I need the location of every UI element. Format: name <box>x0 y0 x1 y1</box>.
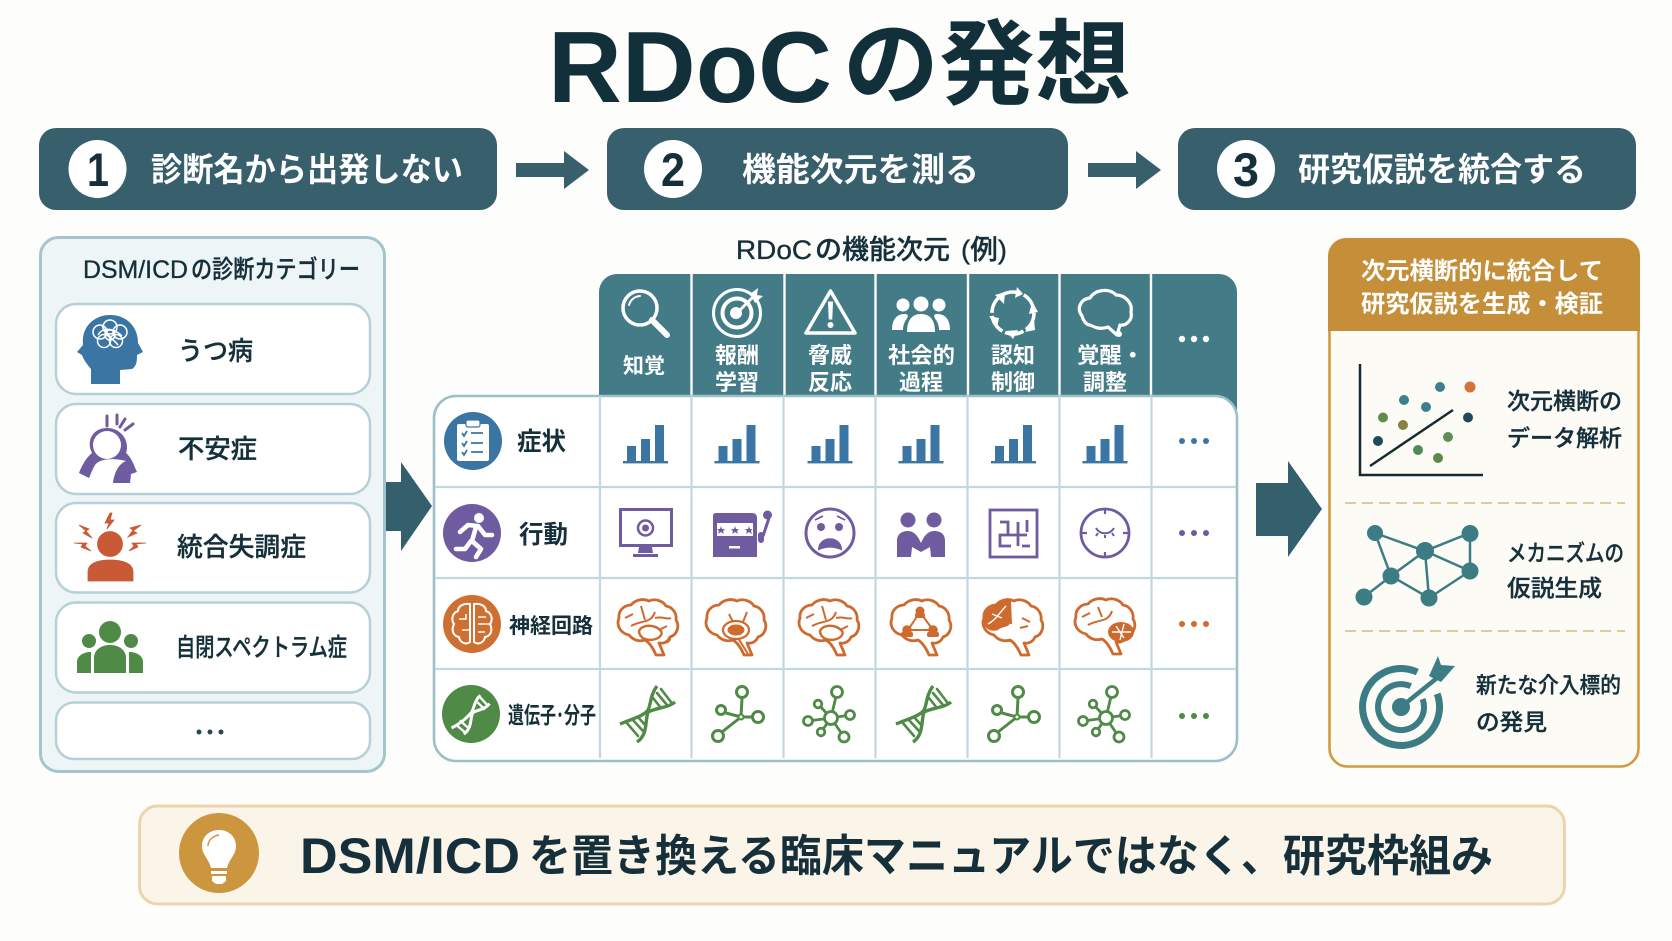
icon: brain outline <box>618 600 678 655</box>
row: behaviour <box>443 504 1209 562</box>
icon: brain circuit <box>443 595 501 653</box>
column: social processes: 過程 <box>899 370 943 395</box>
arrow: matrix to hypotheses <box>1256 461 1322 557</box>
callout: research framework: DSM/ICD <box>300 828 520 884</box>
row: autism spectrum: 自閉スペクトラム症 <box>176 634 347 662</box>
icon: clock with closed eye <box>1081 509 1129 557</box>
label: data analysis <box>1507 388 1622 451</box>
row: depression: うつ病 <box>178 336 253 366</box>
icon: molecule <box>712 686 764 742</box>
table heading: (例) <box>961 235 1007 265</box>
step 1 banner <box>39 128 497 210</box>
row: neural circuits <box>443 595 1209 655</box>
panel header: 次元横断的に統合して <box>1361 258 1603 285</box>
icon: maze <box>990 510 1037 557</box>
label: mechanism hypotheses: 仮説生成 <box>1507 575 1602 601</box>
column: perception: 知覚 <box>623 355 665 378</box>
panel: integrate across dimensions <box>1328 238 1640 766</box>
arrow: categories to matrix <box>386 462 432 551</box>
table heading: RDoC <box>736 235 812 265</box>
icon: light bulb <box>179 813 259 893</box>
arrow: step 2 to step 3 <box>1088 151 1161 189</box>
icon: two people <box>897 512 945 557</box>
column: arousal and regulation: 調整 <box>1083 370 1127 395</box>
step 1 banner: 診断名から出発しない <box>151 151 463 188</box>
row: symptoms <box>444 412 1209 470</box>
row: schizophrenia <box>56 503 370 592</box>
title <box>548 12 1131 124</box>
row: symptoms: 症状 <box>517 428 566 456</box>
label: data analysis: データ解析 <box>1507 425 1622 451</box>
column: perception <box>623 291 667 378</box>
icon: fearful face <box>806 509 854 557</box>
panel heading: DSM/ICD <box>83 256 188 284</box>
label: new intervention targets: 新たな介入標的 <box>1476 673 1621 698</box>
icon: runner <box>443 504 501 562</box>
column: social processes: 社会的 <box>888 343 955 368</box>
step 3 banner: 3 <box>1233 143 1259 196</box>
icon: DNA <box>620 686 675 742</box>
title: の発想 <box>843 13 1131 117</box>
icon: monitor <box>620 510 672 557</box>
icon: hub molecule <box>804 686 854 742</box>
arrow: step 1 to step 2 <box>516 151 589 189</box>
callout: research framework: を置き換える臨床マニュアルではなく、研究枠組み <box>529 832 1493 881</box>
column: more dimensions <box>1179 336 1209 342</box>
column: threat response: 反応 <box>808 370 852 395</box>
step 2 banner: 機能次元を測る <box>742 151 979 188</box>
chart: RDoC matrix <box>434 274 1237 761</box>
column: arousal and regulation <box>1077 290 1144 395</box>
row: genes and molecules <box>442 685 1209 743</box>
column: cognitive control: 認知 <box>991 343 1035 368</box>
icon: brain with cerebellum <box>1075 599 1135 654</box>
icon: brain with prefrontal highlight <box>983 600 1043 655</box>
icon: DNA badge <box>442 685 500 743</box>
column: reward learning <box>714 288 763 395</box>
panel: DSM/ICD diagnostic categories <box>40 238 384 772</box>
icon: three people <box>77 621 143 673</box>
column: cognitive control: 制御 <box>991 370 1035 395</box>
column: threat response: 脅威 <box>808 343 852 368</box>
step 1 banner: 1 <box>87 143 109 196</box>
step 2 banner <box>607 128 1068 210</box>
label: data analysis: 次元横断の <box>1507 388 1622 414</box>
column: arousal and regulation: 覚醒・ <box>1077 343 1144 368</box>
label: mechanism hypotheses <box>1507 540 1624 601</box>
step 3 banner: 研究仮説を統合する <box>1298 151 1586 188</box>
row: behaviour: 行動 <box>519 521 568 549</box>
row: anxiety: 不安症 <box>178 434 257 464</box>
icon: molecule <box>988 686 1040 742</box>
panel header: 研究仮説を生成・検証 <box>1361 291 1603 318</box>
icon: brain outline <box>799 600 859 655</box>
icon: anxious head <box>79 415 137 483</box>
matrix body <box>434 396 1237 761</box>
label: new intervention targets: の発見 <box>1476 709 1547 735</box>
icon: DNA <box>896 686 951 742</box>
icon: slot machine <box>713 510 772 557</box>
table heading <box>736 235 1007 265</box>
matrix header <box>599 274 1237 420</box>
column: reward learning: 学習 <box>715 370 759 395</box>
network icon <box>1356 525 1478 606</box>
row: autism spectrum <box>56 602 370 692</box>
label: mechanism hypotheses: メカニズムの <box>1507 540 1624 566</box>
panel heading: の診断カテゴリー <box>191 256 360 284</box>
step 3 banner <box>1178 128 1636 210</box>
row: anxiety <box>56 404 370 494</box>
title: RDoC <box>548 12 832 124</box>
row: genes and molecules: 遺伝子･分子 <box>508 702 596 728</box>
icon: hub molecule <box>1078 686 1130 742</box>
column: reward learning: 報酬 <box>715 343 759 368</box>
row: depression <box>56 304 370 394</box>
scatter plot icon <box>1360 364 1483 475</box>
column: social processes <box>888 296 955 395</box>
icon: brain with midbrain <box>706 600 766 655</box>
icon: person with lightning bolts <box>74 513 146 581</box>
label: new intervention targets <box>1476 673 1621 735</box>
icon: brain with network <box>891 600 951 655</box>
column: threat response <box>806 291 855 395</box>
panel header <box>1328 238 1640 331</box>
bar icons <box>623 425 1128 463</box>
row: neural circuits: 神経回路 <box>509 615 593 638</box>
icon: head with tangled thoughts <box>77 315 143 384</box>
target icon <box>1363 656 1455 745</box>
step 2 banner: 2 <box>661 143 685 196</box>
row: more categories <box>56 702 370 759</box>
panel heading <box>83 256 360 284</box>
column: cognitive control <box>989 287 1038 395</box>
callout: research framework <box>140 806 1564 904</box>
row: schizophrenia: 統合失調症 <box>177 532 306 562</box>
icon: clipboard <box>444 412 502 470</box>
table heading: の機能次元 <box>815 235 950 265</box>
